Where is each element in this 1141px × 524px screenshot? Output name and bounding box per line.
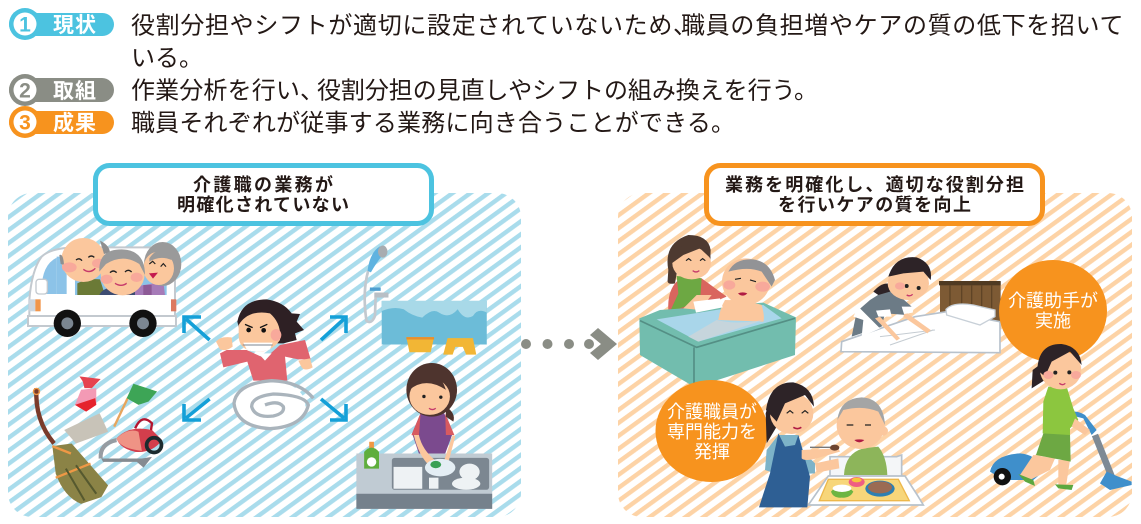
illustration: woman washing dishes: [356, 363, 492, 509]
title box: before: 明確化されていない: [177, 195, 349, 215]
description line: 作業分析を行い、: [131, 78, 324, 104]
callout: care staff: 発揮: [694, 442, 730, 462]
title box: before: [96, 166, 432, 224]
panel: before (blue striped): [8, 166, 521, 517]
illustration: stressed caregiver running in a whirl: [216, 299, 313, 429]
badge: 成果: 成果: [53, 111, 96, 135]
title box: before: 介護職の業務が: [193, 174, 333, 195]
callout: care assistant: 実施: [1035, 311, 1071, 331]
illustration: cleaning tools: [33, 376, 162, 504]
badge: 現状: [9, 8, 114, 40]
status row 2: initiative: [9, 74, 818, 106]
illustration: van with elderly passengers: [28, 238, 181, 337]
description line: 職員それぞれが従事する業務に向き合うことができる。: [131, 110, 735, 137]
title box: after: [706, 166, 1042, 224]
dotted arrow from before to after: [521, 328, 617, 360]
illustration: bathing assistance: [639, 235, 796, 387]
illustration: shower and bathtub: [365, 246, 487, 355]
badge: 取組: [9, 74, 114, 106]
badge: 取組: 取組: [53, 80, 96, 103]
title box: after: 業務を明確化し、適切な役割分担: [725, 174, 1024, 195]
callout: care assistant: [999, 260, 1107, 362]
description line: いる。: [131, 45, 203, 72]
illustration: feeding assistance: [759, 382, 923, 507]
description line: 役割分担の見直しやシフトの組み換えを行う。: [317, 78, 818, 104]
badge: 現状: 現状: [53, 14, 96, 37]
arrow: to bath: [321, 317, 346, 340]
illustration: bed making: [841, 257, 1001, 353]
status row 1: current situation: [9, 8, 1124, 72]
status row 3: result: [9, 106, 735, 138]
description line: [131, 12, 1124, 72]
illustration: vacuuming helper: [990, 344, 1132, 490]
description line: 職員の負担増やケアの質の低下を招いて: [681, 12, 1124, 40]
callout: care staff: 介護職員が: [667, 402, 757, 422]
arrow: to dishwashing: [321, 399, 346, 420]
badge: 成果: 3: [19, 112, 31, 134]
callout: care assistant: 介護助手が: [1008, 291, 1098, 311]
arrow: to cleaning: [184, 399, 210, 420]
badge: 現状: 1: [19, 14, 31, 36]
callout: care staff: [656, 380, 768, 482]
panel: after (orange striped): [618, 166, 1132, 517]
badge: 成果: [9, 106, 114, 138]
badge: 取組: 2: [19, 80, 31, 102]
arrow: to van: [184, 317, 210, 340]
description line: 役割分担やシフトが適切に設定されていないため、: [131, 12, 697, 40]
title box: after: を行いケアの質を向上: [778, 195, 971, 215]
callout: care staff: 専門能力を: [667, 422, 757, 442]
